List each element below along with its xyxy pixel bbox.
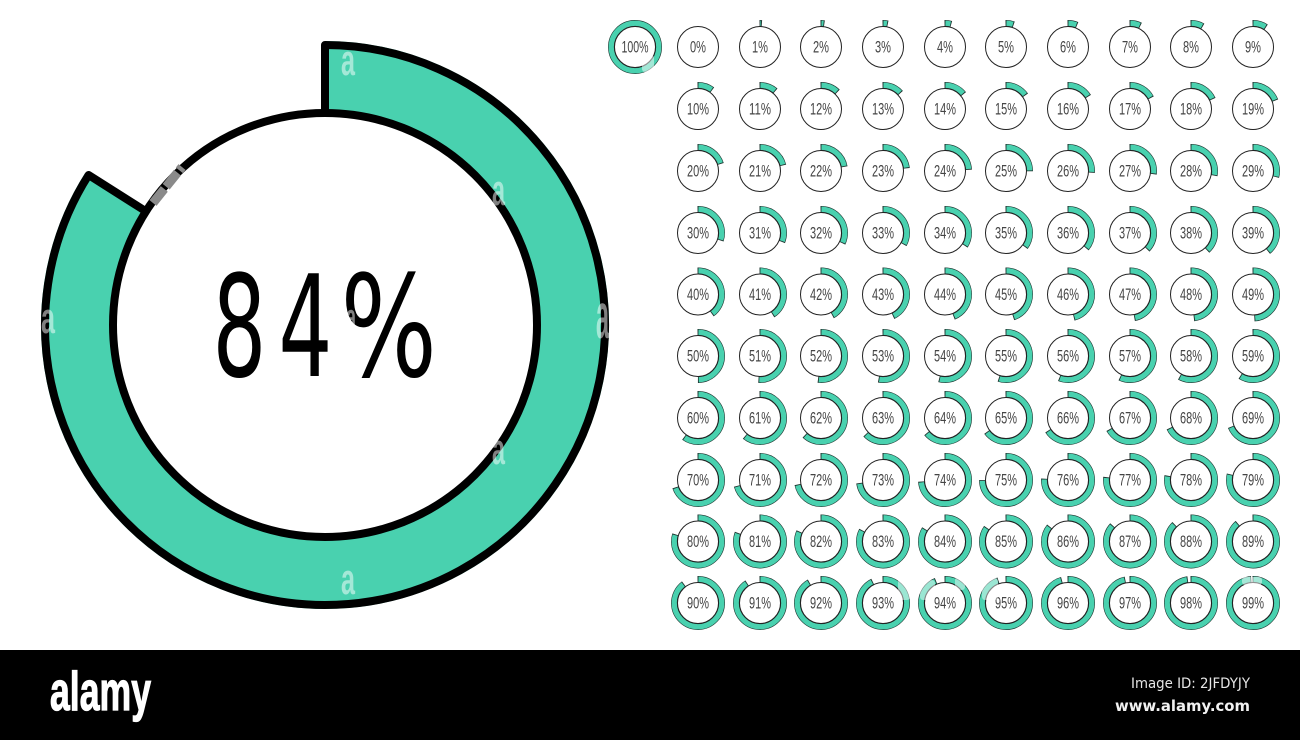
gauge: 67% — [1106, 394, 1154, 442]
gauge: 24% — [921, 147, 969, 195]
gauge: 23%: 23% — [872, 162, 894, 180]
website: www.alamy.com — [1115, 697, 1250, 715]
gauge: 1%: 1% — [752, 38, 768, 56]
gauge: 78%: 78% — [1180, 472, 1202, 490]
gauge: 22% — [797, 147, 845, 195]
gauge: 95% — [982, 579, 1030, 627]
gauge: 5% — [982, 23, 1030, 71]
gauge: 66% — [1044, 394, 1092, 442]
gauge: 47%: 47% — [1119, 286, 1141, 304]
gauge: 53% — [859, 332, 907, 380]
gauge: 92% — [797, 579, 845, 627]
gauge: 20% — [674, 147, 722, 195]
gauge: 47% — [1106, 270, 1154, 319]
gauge: 100% — [611, 23, 659, 71]
gauge: 64%: 64% — [934, 410, 956, 428]
gauge: 96% — [1044, 579, 1092, 627]
gauge: 29% — [1229, 147, 1277, 195]
gauge: 38%: 38% — [1180, 224, 1202, 242]
gauge: 25% — [982, 147, 1030, 195]
gauge: 85%: 85% — [995, 533, 1017, 551]
gauge: 29%: 29% — [1242, 162, 1264, 180]
gauge: 62% — [797, 394, 845, 442]
gauge: 98% — [1167, 579, 1215, 627]
gauge: 19% — [1229, 85, 1277, 133]
gauge: 68%: 68% — [1180, 410, 1202, 428]
gauge: 84%: 84% — [934, 533, 956, 551]
gauge: 88%: 88% — [1180, 533, 1202, 551]
gauge: 49%: 49% — [1242, 286, 1264, 304]
gauge: 31% — [736, 209, 784, 257]
gauge: 2%: 2% — [813, 38, 829, 56]
gauge: 73% — [859, 456, 907, 504]
gauge: 84% — [921, 517, 969, 566]
gauge: 43% — [859, 270, 907, 319]
gauge: 28%: 28% — [1180, 162, 1202, 180]
gauge: 51%: 51% — [749, 348, 771, 366]
gauge: 72%: 72% — [810, 472, 832, 490]
gauge: 83%: 83% — [872, 533, 894, 551]
gauge: 36%: 36% — [1057, 224, 1079, 242]
watermark: a — [492, 425, 505, 474]
gauge: 68% — [1167, 394, 1215, 442]
gauge: 57%: 57% — [1119, 348, 1141, 366]
gauge: 94% — [921, 579, 969, 627]
gauge: 33%: 33% — [872, 224, 894, 242]
gauge: 6%: 6% — [1060, 38, 1076, 56]
inner circle — [113, 113, 537, 537]
gauge: 60% — [674, 394, 722, 442]
watermark: a — [341, 36, 355, 85]
gauge: 89%: 89% — [1242, 533, 1264, 551]
gauge: 77%: 77% — [1119, 472, 1141, 490]
gauge: 65%: 65% — [995, 410, 1017, 428]
gauge: 94%: 94% — [934, 594, 956, 612]
gauge: 55% — [982, 332, 1030, 380]
gauge: 49% — [1229, 270, 1277, 319]
value: percent sign: % — [340, 245, 437, 409]
gauge: 48% — [1167, 270, 1215, 319]
gauge: 44%: 44% — [934, 286, 956, 304]
gauge: 12% — [797, 85, 845, 133]
gauge: 63% — [859, 394, 907, 442]
gauge: 44% — [921, 270, 969, 319]
gauge: 75% — [982, 456, 1030, 504]
gauge: 65% — [982, 394, 1030, 442]
gauge: 76% — [1044, 456, 1092, 504]
gauge: 27%: 27% — [1119, 162, 1141, 180]
gauge: 69%: 69% — [1242, 410, 1264, 428]
gauge: 45% — [982, 270, 1030, 319]
gauge: 43%: 43% — [872, 286, 894, 304]
gauge: 6% — [1044, 23, 1092, 71]
gauge: 3%: 3% — [875, 38, 891, 56]
watermark — [41, 36, 1262, 604]
gauge: 57% — [1106, 332, 1154, 380]
gauge: 70% — [674, 456, 722, 504]
gauge: 16%: 16% — [1057, 100, 1079, 118]
gauge: 83% — [859, 517, 907, 566]
gauge: 42% — [797, 270, 845, 319]
gauge: 13%: 13% — [872, 100, 894, 118]
gauge: 14% — [921, 85, 969, 133]
gauge: 3% — [859, 23, 907, 71]
gauge: 70%: 70% — [687, 472, 709, 490]
arc fill — [77, 77, 573, 573]
value: 84: 84 — [212, 246, 332, 410]
gauge: 31%: 31% — [749, 224, 771, 242]
gauge: 71%: 71% — [749, 472, 771, 490]
gauge: 93% — [859, 579, 907, 627]
gauge: 10% — [674, 85, 722, 133]
gauge: 52% — [797, 332, 845, 380]
gauge: 89% — [1229, 517, 1277, 566]
gauge: 13% — [859, 85, 907, 133]
gauge: 74%: 74% — [934, 472, 956, 490]
gauge: 25%: 25% — [995, 162, 1017, 180]
gauge: 32% — [797, 209, 845, 257]
gauge: 79%: 79% — [1242, 472, 1264, 490]
gauge: 60%: 60% — [687, 410, 709, 428]
gauge: 46% — [1044, 270, 1092, 319]
gauge: 38% — [1167, 209, 1215, 257]
gauge: 15%: 15% — [995, 100, 1017, 118]
arc outline — [45, 45, 605, 605]
gauge: 11% — [736, 85, 784, 133]
gauge: 79% — [1229, 456, 1277, 504]
watermark: a — [596, 280, 609, 352]
gauge: 37%: 37% — [1119, 224, 1141, 242]
gauge: 17% — [1106, 85, 1154, 133]
gauge: 93%: 93% — [872, 594, 894, 612]
gauge: 42%: 42% — [810, 286, 832, 304]
gauge: 26%: 26% — [1057, 162, 1079, 180]
gauge: 91%: 91% — [749, 594, 771, 612]
gauge: 0%: 0% — [690, 38, 706, 56]
gauge: 18%: 18% — [1180, 100, 1202, 118]
gauge: 36% — [1044, 209, 1092, 257]
gauge: 86% — [1044, 517, 1092, 566]
gauge: 63%: 63% — [872, 410, 894, 428]
gauge: 10%: 10% — [687, 100, 709, 118]
gauge: 27% — [1106, 147, 1154, 195]
gauge: 15% — [982, 85, 1030, 133]
gauge: 35% — [982, 209, 1030, 257]
gauge: 61%: 61% — [749, 410, 771, 428]
gauge: 37% — [1106, 209, 1154, 257]
footer bar — [0, 650, 1300, 740]
gauge: 0% — [678, 26, 718, 68]
gauge: 21% — [736, 147, 784, 195]
gauge: 45%: 45% — [995, 286, 1017, 304]
panel: large 84% gauge — [45, 45, 605, 605]
gauge: 2% — [797, 23, 845, 71]
gauge: 4% — [921, 23, 969, 71]
gauge: 30% — [674, 209, 722, 257]
gauge: 59%: 59% — [1242, 348, 1264, 366]
gauge: 90% — [674, 579, 722, 627]
gauge: 1% — [736, 23, 784, 71]
gauge: 75%: 75% — [995, 472, 1017, 490]
gauge: 54%: 54% — [934, 348, 956, 366]
gauge: 17%: 17% — [1119, 100, 1141, 118]
gauge: 8%: 8% — [1183, 38, 1199, 56]
watermark: a — [492, 166, 505, 215]
gauge: 62%: 62% — [810, 410, 832, 428]
gauge: 55%: 55% — [995, 348, 1017, 366]
gauge: 30%: 30% — [687, 224, 709, 242]
gauge: 91% — [736, 579, 784, 627]
gauge: 7%: 7% — [1122, 38, 1138, 56]
gauge: 54% — [921, 332, 969, 380]
gauge: 87%: 87% — [1119, 533, 1141, 551]
gauge: 80%: 80% — [687, 533, 709, 551]
gauge: 40% — [674, 270, 722, 319]
gauge: 67%: 67% — [1119, 410, 1141, 428]
gauge: 39% — [1229, 209, 1277, 257]
gauge: 51% — [736, 332, 784, 380]
gauge: 41% — [736, 270, 784, 319]
gauge: 9%: 9% — [1245, 38, 1261, 56]
gauge: 58%: 58% — [1180, 348, 1202, 366]
gauge: 26% — [1044, 147, 1092, 195]
gauge: 78% — [1167, 456, 1215, 504]
gauge: 76%: 76% — [1057, 472, 1079, 490]
gauge: 19%: 19% — [1242, 100, 1264, 118]
gauge: 81% — [736, 517, 784, 566]
gauge: 58% — [1167, 332, 1215, 380]
gauge: 99% — [1229, 579, 1277, 627]
gauge: 24%: 24% — [934, 162, 956, 180]
watermark: a — [41, 294, 55, 343]
gauge: 14%: 14% — [934, 100, 956, 118]
gauge: 9% — [1229, 23, 1277, 71]
gauge: 98%: 98% — [1180, 594, 1202, 612]
gauge: 87% — [1106, 517, 1154, 566]
gauge: 53%: 53% — [872, 348, 894, 366]
gauge: 92%: 92% — [810, 594, 832, 612]
image id: Image ID: 2JFDYJY — [1131, 676, 1250, 692]
gauge: 82%: 82% — [810, 533, 832, 551]
gauge: 90%: 90% — [687, 594, 709, 612]
gauge: 16% — [1044, 85, 1092, 133]
gauge: 81%: 81% — [749, 533, 771, 551]
gauge: 88% — [1167, 517, 1215, 566]
gauge: 95%: 95% — [995, 594, 1017, 612]
gauge: 71% — [736, 456, 784, 504]
gauge: 100%: 100% — [622, 38, 649, 56]
gauge: 59% — [1229, 332, 1277, 380]
gauge: 33% — [859, 209, 907, 257]
gauge: 86%: 86% — [1057, 533, 1079, 551]
gauge: 80% — [674, 517, 722, 566]
gauge: 32%: 32% — [810, 224, 832, 242]
gauge: 73%: 73% — [872, 472, 894, 490]
gauge: 99%: 99% — [1242, 594, 1264, 612]
gauge: 96%: 96% — [1057, 594, 1079, 612]
gauge: 97% — [1106, 579, 1154, 627]
gauge: 77% — [1106, 456, 1154, 504]
gauge: 56%: 56% — [1057, 348, 1079, 366]
gauge: 97%: 97% — [1119, 594, 1141, 612]
gauge: 56% — [1044, 332, 1092, 380]
gauge: 22%: 22% — [810, 162, 832, 180]
gauge: 52%: 52% — [810, 348, 832, 366]
gauge: 4%: 4% — [937, 38, 953, 56]
gauge: 18% — [1167, 85, 1215, 133]
gauge: 50%: 50% — [687, 348, 709, 366]
gauge: 48%: 48% — [1180, 286, 1202, 304]
gauge: 28% — [1167, 147, 1215, 195]
gauge: 72% — [797, 456, 845, 504]
gauge: 39%: 39% — [1242, 224, 1264, 242]
watermark: a — [341, 555, 355, 604]
gauge: 8% — [1167, 23, 1215, 71]
gauge: 7% — [1106, 23, 1154, 71]
gauge: 66%: 66% — [1057, 410, 1079, 428]
gauge: 82% — [797, 517, 845, 566]
logo: alamy: alamy — [50, 660, 151, 722]
gauge: 64% — [921, 394, 969, 442]
gauge: 40%: 40% — [687, 286, 709, 304]
gauge: 50% — [674, 332, 722, 380]
gauge: 11%: 11% — [749, 100, 771, 118]
gauge: 35%: 35% — [995, 224, 1017, 242]
panel: gauge grid — [611, 23, 1277, 627]
watermark: a — [346, 296, 356, 337]
gauge: 21%: 21% — [749, 162, 771, 180]
gauge: 74% — [921, 456, 969, 504]
gauge: 61% — [736, 394, 784, 442]
gauge: 34%: 34% — [934, 224, 956, 242]
gauge: 5%: 5% — [998, 38, 1014, 56]
gauge: 12%: 12% — [810, 100, 832, 118]
gauge: 69% — [1229, 394, 1277, 442]
gauge: 23% — [859, 147, 907, 195]
gauge: 34% — [921, 209, 969, 257]
gauge: 41%: 41% — [749, 286, 771, 304]
gauge: 46%: 46% — [1057, 286, 1079, 304]
gauge: 85% — [982, 517, 1030, 566]
gauge: 20%: 20% — [687, 162, 709, 180]
